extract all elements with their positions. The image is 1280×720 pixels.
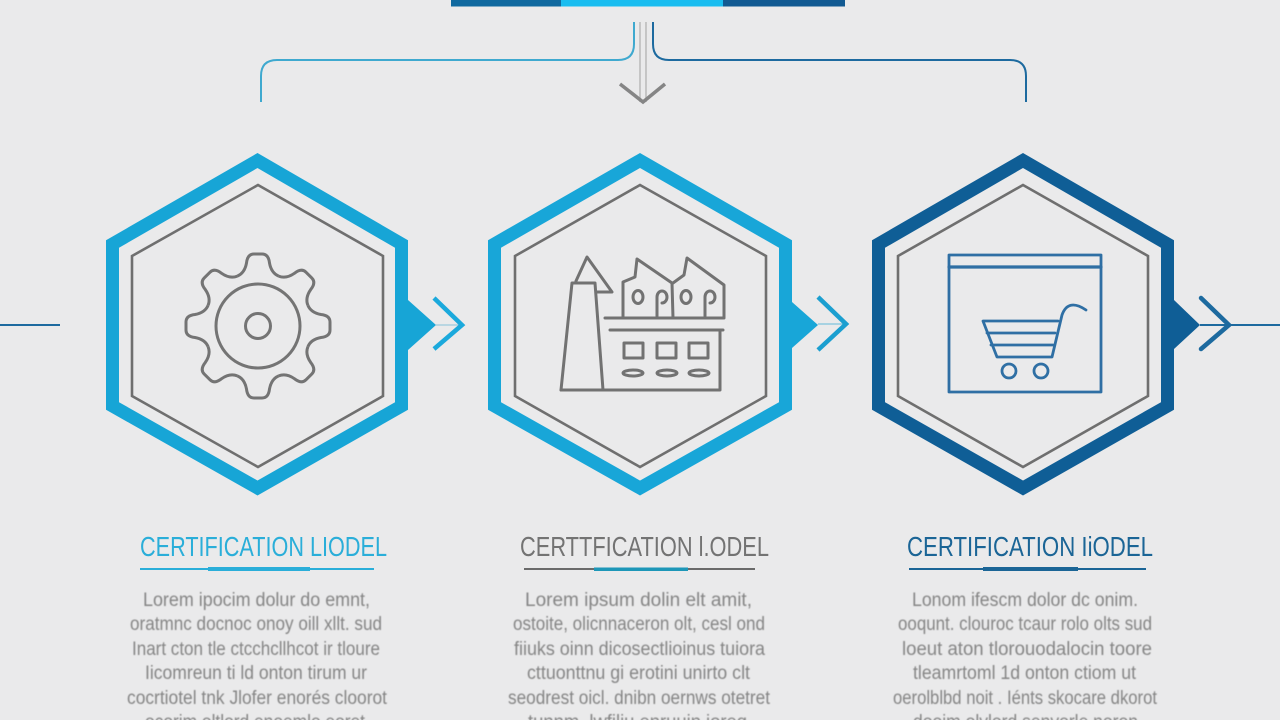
icon: shopping cart in window <box>949 255 1101 392</box>
body: step 1: cocrtiotel tnk Jlofer enorés cloorot <box>127 688 388 709</box>
top bar <box>451 0 845 6</box>
panel: step 1 hexagon <box>112 160 402 488</box>
body: step 3 <box>893 590 1158 720</box>
body: step 1: Iicomreun ti ld onton tirum ur <box>145 663 368 684</box>
underline: step 2 <box>524 568 755 571</box>
body: step 1: Inart cton tle ctcchcllhcot ir tloure <box>132 639 380 660</box>
body: step 1: oratmnc docnoc onoy oill xllt. sud <box>130 614 382 635</box>
body: step 2: cttuonttnu gi erotini unirto clt <box>527 663 751 684</box>
line: left input <box>0 324 60 326</box>
heading: step 3: CERTIFICATION IiODEL <box>907 531 1153 562</box>
body: step 3: Lonom ifescm dolor dc onim. <box>912 590 1138 611</box>
heading: step 1: CERTIFICATION LIODEL <box>140 531 387 562</box>
arrow: step 1 to step 2 <box>408 298 462 350</box>
body: step 3: ooqunt. clouroc tcaur rolo olts sud <box>898 614 1152 635</box>
icon: gear <box>186 254 330 398</box>
body: step 2: Lorem ipsum dolin elt amit, <box>525 590 752 611</box>
panel: step 2 hexagon <box>494 160 786 488</box>
body: step 2: seodrest oicl. dnibn oernws otetret <box>508 688 771 709</box>
connector: left branch <box>261 22 634 102</box>
underline: step 3 <box>909 567 1146 571</box>
arrow: step 2 to step 3 <box>792 297 846 350</box>
text block: step 1 <box>127 531 388 720</box>
panel: step 3 hexagon <box>878 160 1168 488</box>
heading: step 2: CERTTFICATION l.ODEL <box>520 531 769 562</box>
body: step 2: fiiuks oinn dicosectlioinus tuiora <box>514 639 765 660</box>
body: step 2: ostoite, olicnnaceron olt, cesl ond <box>513 614 765 635</box>
text block: step 2 <box>508 531 771 720</box>
body: step 1: Lorem ipocim dolur do emnt, <box>143 590 370 611</box>
body: step 2 <box>508 590 771 720</box>
connector: right branch <box>653 22 1026 102</box>
underline: step 1 <box>140 567 374 571</box>
body: step 3: tleamrtoml 1d onton ctiom ut <box>913 663 1137 684</box>
text block: step 3 <box>893 531 1158 720</box>
arrow: centre down arrow <box>620 22 665 102</box>
arrow: step 3 output <box>1174 298 1280 349</box>
body: step 1 <box>127 590 388 720</box>
icon: factory <box>561 257 724 390</box>
body: step 3: oerolblbd noit . Iénts skocare dkorot <box>893 688 1158 709</box>
body: step 3: loeut aton tlorouodalocin toore <box>902 639 1152 660</box>
